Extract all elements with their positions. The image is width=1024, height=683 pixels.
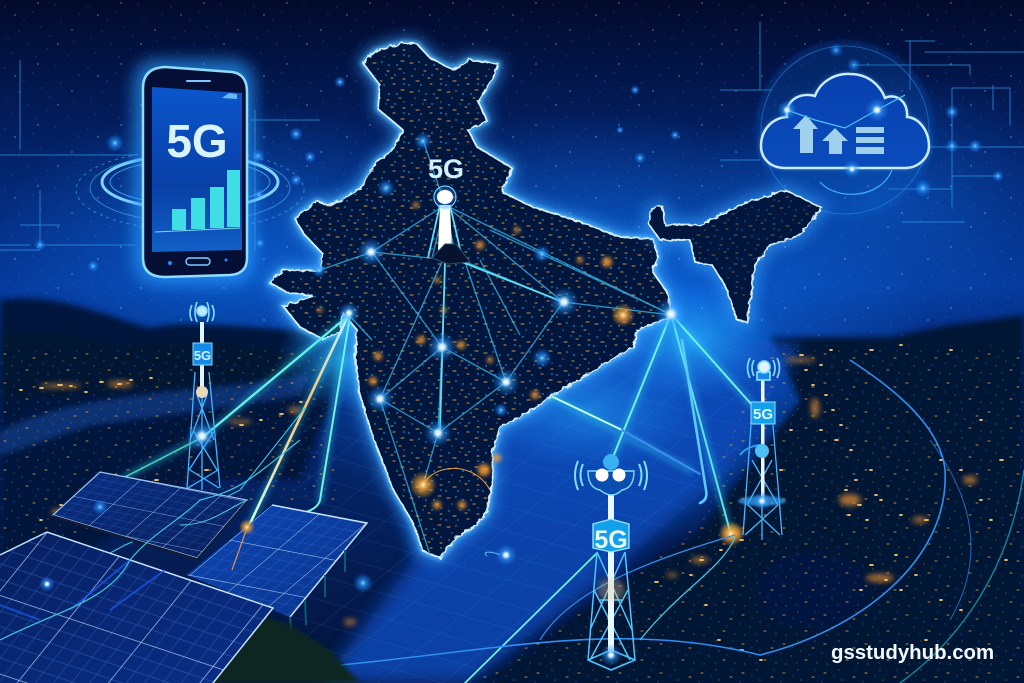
Northeast India [648,190,822,322]
India map [270,43,822,558]
sweeping arcs around the coast [340,360,1024,683]
phone: orbit rings [76,150,304,230]
phone label: 5G: 5G [166,115,228,167]
tower left with 5G [186,302,220,490]
city lights: orange clusters on land [20,345,1007,660]
phone with 5G screen [134,60,254,284]
watermark text: gsstudyhub.com [831,642,994,664]
central tower with 5G label [428,154,470,264]
energy flows on the panels [0,440,373,640]
tower right label: 5G [753,406,773,423]
beams from east hub to towers [465,297,752,683]
solar panel top [53,472,247,561]
map nodes [311,132,635,566]
solar panel right [187,505,367,640]
cloud with upload arrows [755,40,935,220]
tower centre label: 5G [594,526,628,554]
circuit lines: left and right tech overlay [0,22,1024,250]
tower right antenna [748,358,780,380]
tower left label: 5G [194,348,211,363]
tower centre antenna [575,454,647,495]
phone signal bars [172,170,240,230]
orange city clusters on the map [318,202,612,509]
solar panels [0,440,373,683]
tower centre-bottom with 5G [575,454,647,670]
vegetation under panels [205,612,360,683]
glowing network dots in the sky [34,43,1004,272]
tower left antenna [190,302,214,322]
network links inside India [320,140,672,555]
landscape: dark land and water at night [0,280,1024,683]
tower right with 5G [738,358,786,540]
beams from west hub to towers and solar [50,302,360,585]
solar panel bottom [0,532,273,683]
map label: 5G: 5G [428,154,464,184]
